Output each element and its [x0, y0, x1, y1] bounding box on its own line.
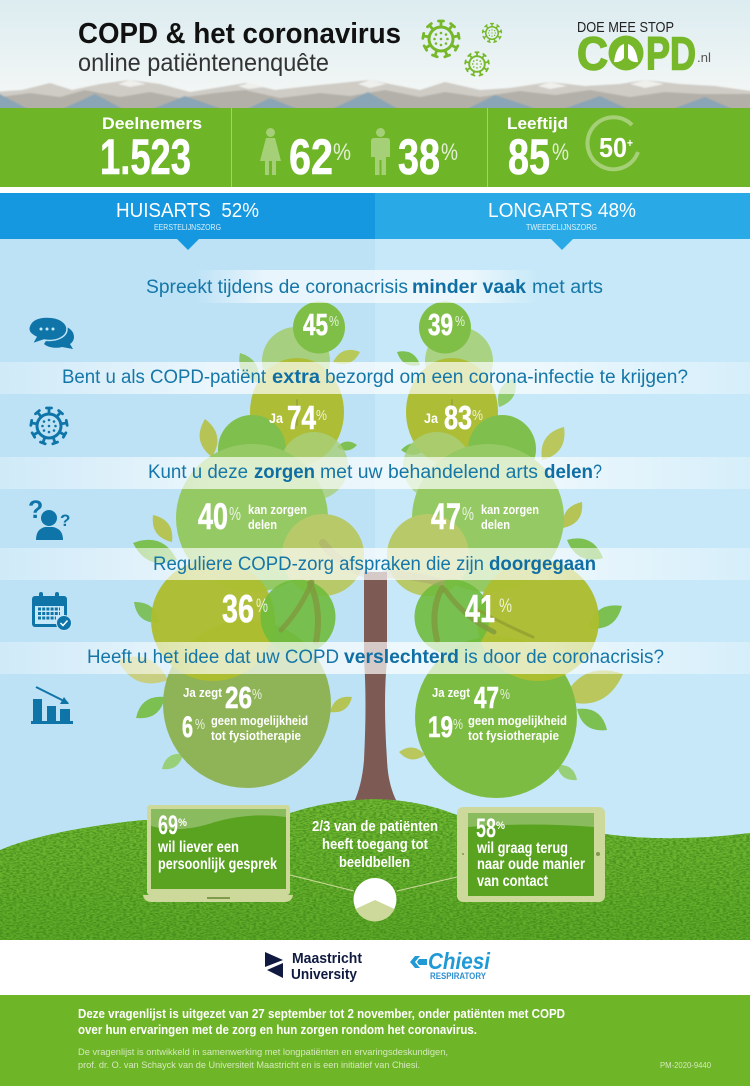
heading: verslechterd: Heeft u het idee dat uw COPD: [87, 647, 339, 668]
title: [78, 18, 401, 77]
percentages question 3: kan zorgen: [481, 503, 539, 517]
tree leaves: [114, 346, 629, 784]
percentages question 2: %: [472, 407, 483, 424]
icon: ring 50 plus: 50: [599, 132, 627, 163]
icon: person with question marks: [28, 496, 70, 540]
percentages question 3: delen: [248, 518, 277, 532]
huisarts header: [0, 193, 375, 250]
icon: video call circle: [354, 878, 396, 921]
heading: verslechterd: [87, 647, 664, 668]
percentages question 2: Ja: [269, 410, 283, 426]
stat: deelnemers: [100, 114, 202, 185]
logo: doe mee stop COPD: DOE MEE STOP: [577, 19, 674, 36]
heading: extra bezorgd: bezorgd om een corona-infectie te krijgen?: [325, 367, 688, 388]
percentages question 4: 36: [222, 588, 254, 631]
percentages question 1: 45: [303, 307, 328, 342]
heading: verslechterd: is door de coronacrisis?: [464, 647, 664, 668]
logo: Chiesi Respiratory: Chiesi: [428, 948, 491, 974]
heading: extra bezorgd: Bent u als COPD-patiënt: [62, 367, 267, 388]
icon: ring 50 plus: [588, 117, 638, 169]
footer credits text: [78, 1047, 448, 1071]
text: 69 procent: %: [178, 817, 187, 829]
percentages question 4: 41: [465, 588, 495, 631]
title: online patiëntenenquête: [78, 49, 329, 77]
heading: zorgen delen: Kunt u deze: [148, 462, 248, 483]
logo: doe mee stop COPD: C: [577, 28, 608, 80]
heading: doorgegaan: doorgegaan: [489, 554, 596, 575]
heading: minder vaak: Spreekt tijdens de coronacrisis: [146, 277, 408, 298]
icon: woman: [260, 128, 281, 175]
heading: zorgen delen: delen: [544, 462, 593, 483]
percentages question 5 right: %: [453, 716, 463, 733]
question 1 band: [146, 270, 603, 303]
tablet: [457, 807, 605, 902]
question 5 band: [0, 642, 750, 674]
stat: vrouwen 62 procent: %: [333, 139, 351, 166]
stat: leeftijd 85 procent: Leeftijd: [507, 114, 568, 133]
text: beeldbellen: 2/3 van de patiënten: [312, 819, 438, 835]
heading: minder vaak: [146, 277, 603, 298]
heading: extra bezorgd: extra: [272, 367, 320, 388]
stat: deelnemers: 1.523: [100, 129, 191, 185]
footer intro text: [78, 1007, 565, 1037]
heading: minder vaak: minder vaak: [412, 277, 526, 298]
percentages question 5 left: 6: [182, 711, 193, 744]
text: 58 procent: 58: [476, 813, 496, 843]
percentages question 2: 74: [287, 399, 317, 436]
text: 58 procent: [476, 813, 585, 890]
heading: doorgegaan: Reguliere COPD-zorg afspraken die zijn: [153, 554, 484, 575]
percentages question 5 left: %: [252, 686, 262, 703]
tree canopy circles: [151, 302, 599, 798]
percentages question 3: [198, 496, 539, 537]
huisarts header: HUISARTS 52%: [116, 200, 259, 222]
percentages question 4: [222, 588, 512, 631]
text: 58 procent: van contact: [477, 873, 549, 890]
heading: minder vaak: met arts: [532, 277, 603, 298]
heading: extra bezorgd: [62, 367, 688, 388]
percentages question 1: [303, 307, 465, 342]
text: 69 procent: 69: [158, 810, 178, 840]
percentages question 5 left: geen mogelijkheid: [211, 714, 308, 728]
tree trunk and branches: [281, 400, 533, 802]
heading: verslechterd: verslechterd: [344, 647, 459, 668]
percentages question 5 right: 47: [474, 680, 499, 715]
heading: zorgen delen: ?: [593, 462, 602, 483]
percentages question 3: %: [229, 504, 241, 524]
percentages question 4: %: [256, 596, 268, 617]
body background: [0, 239, 750, 879]
percentages question 5 right: %: [500, 686, 510, 703]
stat: mannen 38 procent: 38: [398, 129, 440, 185]
text: 58 procent: %: [496, 820, 505, 832]
stat: mannen 38 procent: %: [441, 139, 458, 166]
percentages question 5 left: %: [195, 716, 205, 733]
percentages question 4: %: [499, 596, 512, 617]
icon: virus: [31, 408, 67, 444]
stat: leeftijd 85 procent: 85: [508, 129, 550, 185]
percentages question 5 left: [182, 680, 308, 744]
logo: Maastricht University: University: [291, 966, 358, 983]
logo: Maastricht University: [265, 950, 362, 983]
percentages question 5 right: geen mogelijkheid: [468, 714, 567, 728]
stat: leeftijd 85 procent: %: [552, 139, 569, 166]
percentages question 3: 40: [198, 496, 228, 537]
mountain range: [0, 80, 750, 114]
footer credits text: De vragenlijst is ontwikkeld in samenwerking met longpatiënten en ervaringsdeskundigen,: [78, 1047, 448, 1058]
document code: PM-2020-9440: [660, 1060, 711, 1070]
hill of grass: [0, 799, 750, 940]
text: 69 procent: persoonlijk gesprek: [158, 856, 277, 873]
logo: doe mee stop COPD: PD: [646, 28, 696, 80]
question 2 band: [0, 362, 750, 394]
footer intro text: over hun ervaringen met de zorg en hun zorgen rondom het coronavirus.: [78, 1023, 477, 1037]
huisarts header: EERSTELIJNSZORG: [154, 222, 221, 232]
icon: person with question marks: ?: [28, 496, 43, 524]
text: 58 procent: naar oude manier: [477, 856, 585, 873]
icon: person with question marks: ?: [60, 511, 70, 530]
logo: Chiesi Respiratory: RESPIRATORY: [430, 971, 486, 981]
header background with sky: [0, 0, 750, 108]
percentages question 2: Ja: [424, 410, 438, 426]
longarts header: [375, 193, 750, 250]
percentages question 3: delen: [481, 518, 510, 532]
logo: doe mee stop COPD: .nl: [697, 50, 711, 65]
heading: zorgen delen: zorgen: [254, 462, 315, 483]
stat: vrouwen 62 procent: 62: [289, 129, 333, 185]
text: beeldbellen: beeldbellen: [339, 855, 410, 871]
percentages question 3: %: [462, 504, 474, 524]
stats band: [0, 108, 750, 187]
percentages question 2: [269, 399, 483, 436]
icon: calendar with check: [32, 592, 72, 630]
icon: chat bubbles: [29, 317, 74, 349]
stat: deelnemers: Deelnemers: [102, 114, 202, 133]
percentages question 5 right: [428, 680, 567, 744]
connector lines: [290, 875, 457, 891]
heading: zorgen delen: [148, 462, 602, 483]
text: beeldbellen: heeft toegang tot: [322, 837, 428, 853]
footer: [0, 995, 750, 1086]
text: beeldbellen: [312, 819, 438, 871]
logo strip: [0, 940, 750, 995]
percentages question 5 left: Ja zegt: [183, 686, 223, 700]
icon: ring 50 plus: +: [627, 136, 633, 150]
percentages question 5 right: tot fysiotherapie: [468, 729, 559, 743]
percentages question 5 left: tot fysiotherapie: [211, 729, 301, 743]
percentages question 1: %: [329, 313, 339, 330]
icon: coronavirus particles: [423, 21, 501, 76]
footer credits text: prof. dr. O. van Schayck van de Universiteit Maastricht en is een initiatief van Chiesi.: [78, 1060, 420, 1071]
percentages question 3: 47: [431, 496, 461, 537]
percentages question 5 right: Ja zegt: [432, 686, 471, 700]
text: 69 procent: wil liever een: [157, 839, 239, 856]
percentages question 3: kan zorgen: [248, 503, 307, 517]
percentages question 1: %: [455, 313, 465, 330]
logo: Chiesi Respiratory: [410, 948, 491, 981]
icon: man: [371, 128, 390, 175]
text: 58 procent: wil graag terug: [476, 840, 568, 857]
percentages question 2: %: [316, 407, 327, 424]
percentages question 1: 39: [428, 307, 453, 342]
laptop: [143, 805, 293, 902]
logo: doe mee stop COPD: [577, 19, 711, 80]
percentages question 2: 83: [444, 399, 472, 436]
text: 69 procent: [157, 810, 277, 873]
percentages question 5 right: 19: [428, 711, 453, 744]
footer intro text: Deze vragenlijst is uitgezet van 27 september tot 2 november, onder patiënten met COPD: [78, 1007, 565, 1021]
question 3 band: [0, 457, 750, 489]
icon: declining bar chart: [31, 687, 73, 724]
percentages question 5 left: 26: [225, 680, 252, 715]
heading: zorgen delen: met uw behandelend arts: [320, 462, 538, 483]
longarts header: LONGARTS 48%: [488, 200, 636, 222]
logo: Maastricht University: Maastricht: [292, 950, 362, 967]
longarts header: TWEEDELIJNSZORG: [526, 222, 597, 232]
title: COPD & het coronavirus: [78, 18, 401, 50]
question 4 band: [0, 548, 750, 580]
